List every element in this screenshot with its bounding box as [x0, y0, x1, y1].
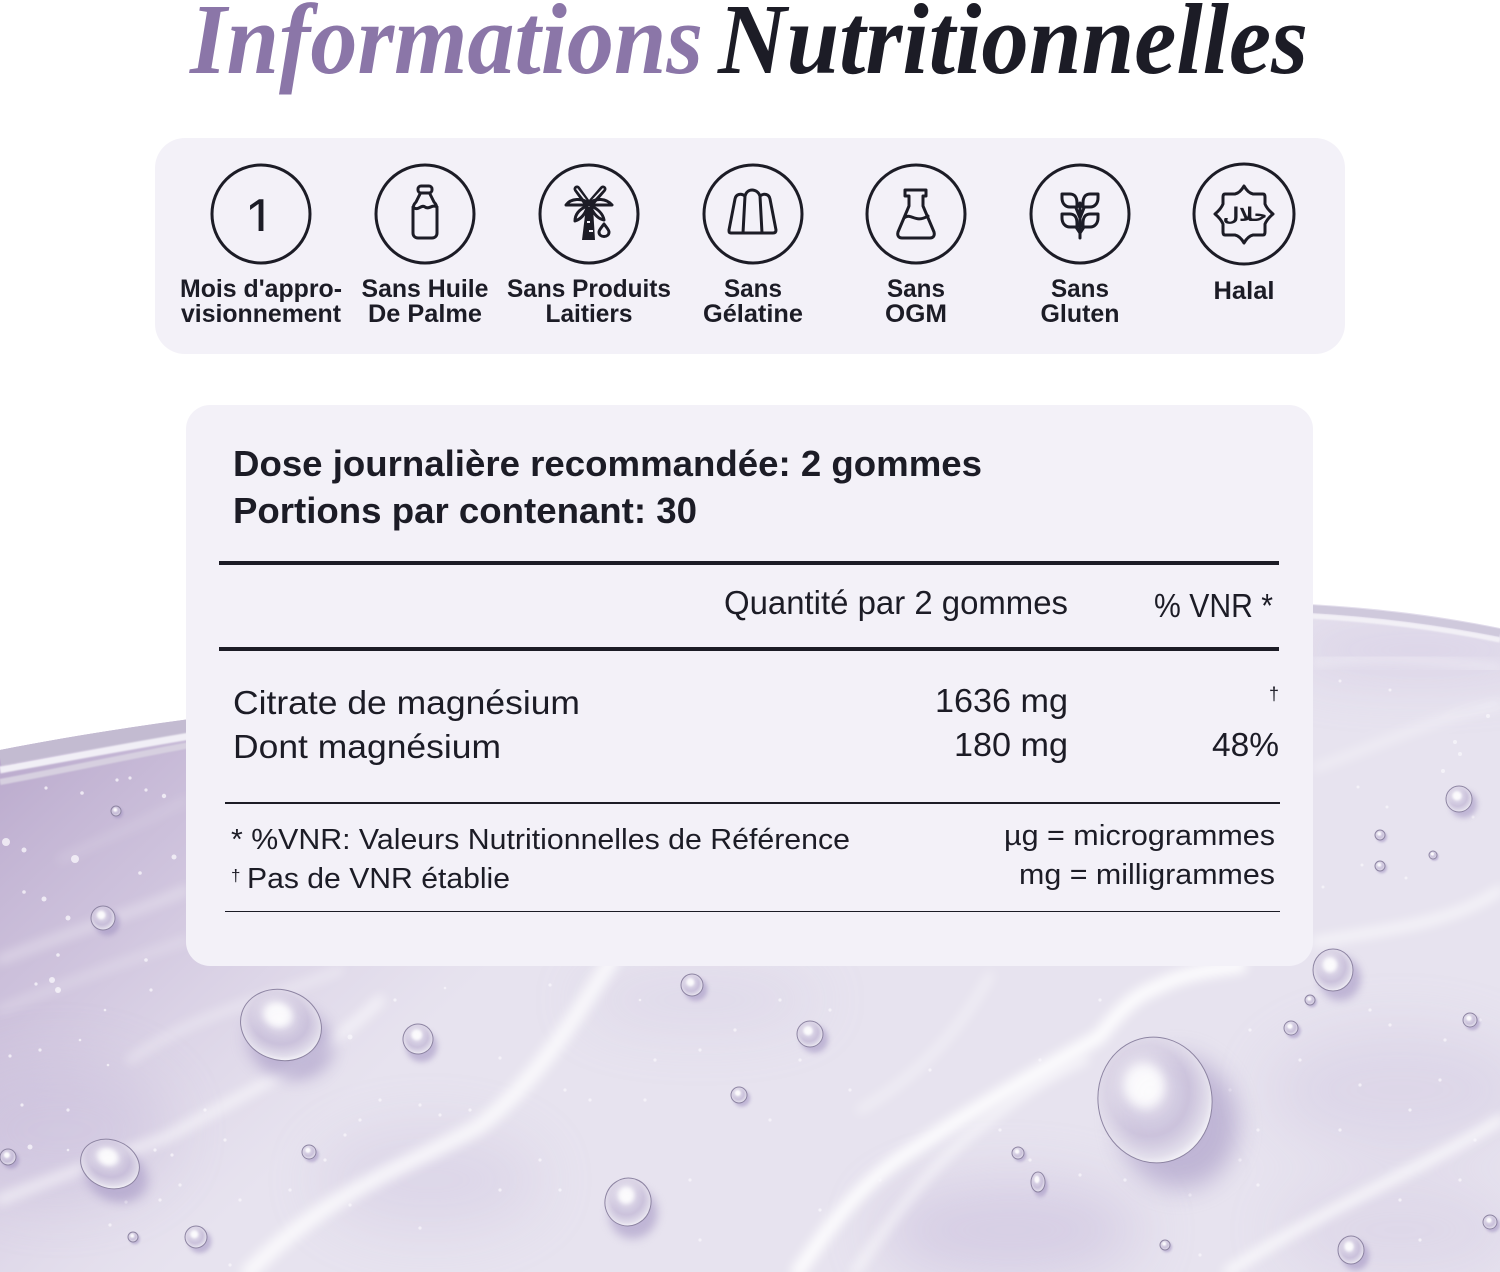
badge: halal — [1194, 164, 1294, 305]
badge: 1 month supply: Mois d'appro- — [180, 275, 342, 303]
dose heading: Portions par contenant: 30 — [233, 490, 697, 531]
badge: 1 month supply: visionnement — [181, 300, 342, 328]
gel texture background — [0, 600, 1500, 1272]
dose heading: Dose journalière recommandée: 2 gommes — [233, 443, 982, 484]
row: magnesium citrate: Citrate de magnésium — [233, 684, 580, 721]
badge: palm oil free: Sans Huile — [362, 275, 489, 303]
footnotes: * %VNR: Valeurs Nutritionnelles de Référence — [231, 824, 850, 856]
row: magnesium — [233, 726, 1279, 765]
panel: nutrition table — [186, 405, 1313, 966]
row: magnesium citrate: 1636 mg — [935, 682, 1068, 719]
badge: dairy free: Laitiers — [546, 300, 632, 328]
badge: GMO free: Sans — [887, 275, 945, 303]
panel: product attributes — [155, 138, 1345, 354]
footnotes — [231, 824, 850, 895]
badge: 1 month supply: 1 — [245, 187, 275, 249]
row: magnesium: 180 mg — [954, 726, 1068, 763]
badge: gluten free — [1031, 165, 1129, 328]
table header: Quantité par 2 gommes — [724, 584, 1068, 621]
badge: gluten free: Sans — [1051, 275, 1109, 303]
badge: halal: حلال — [1223, 204, 1267, 226]
badge: gelatin free: Gélatine — [703, 300, 803, 328]
badge: gelatin free: Sans — [724, 275, 782, 303]
badge: palm oil free — [362, 165, 489, 328]
title — [189, 0, 1308, 95]
badge: dairy free — [507, 165, 671, 328]
badge: GMO free: OGM — [885, 300, 947, 328]
badge: dairy free: Sans Produits — [507, 275, 671, 303]
badge: gluten free: Gluten — [1040, 300, 1120, 328]
badge: gelatin free — [703, 165, 803, 328]
units legend: mg = milligrammes — [1019, 859, 1275, 891]
table header: % VNR * — [1154, 587, 1273, 624]
row: magnesium citrate — [233, 682, 1279, 721]
table header — [724, 584, 1273, 624]
row: magnesium: 48% — [1212, 726, 1279, 763]
gel top edge — [0, 609, 1500, 782]
badge: GMO free — [867, 165, 965, 328]
small droplets — [2, 680, 1490, 1267]
footnotes: † — [231, 866, 240, 885]
badge: 1 month supply — [180, 165, 342, 328]
units legend: µg = microgrammes — [1004, 820, 1275, 852]
badge: halal: Halal — [1214, 277, 1274, 305]
dose heading — [233, 443, 982, 531]
row: magnesium: Dont magnésium — [233, 728, 501, 765]
row: magnesium citrate: † — [1269, 684, 1279, 704]
footnotes: Pas de VNR établie — [247, 863, 510, 895]
units legend — [1004, 820, 1275, 891]
large droplets — [0, 786, 1500, 1270]
badge: palm oil free: De Palme — [368, 300, 482, 328]
